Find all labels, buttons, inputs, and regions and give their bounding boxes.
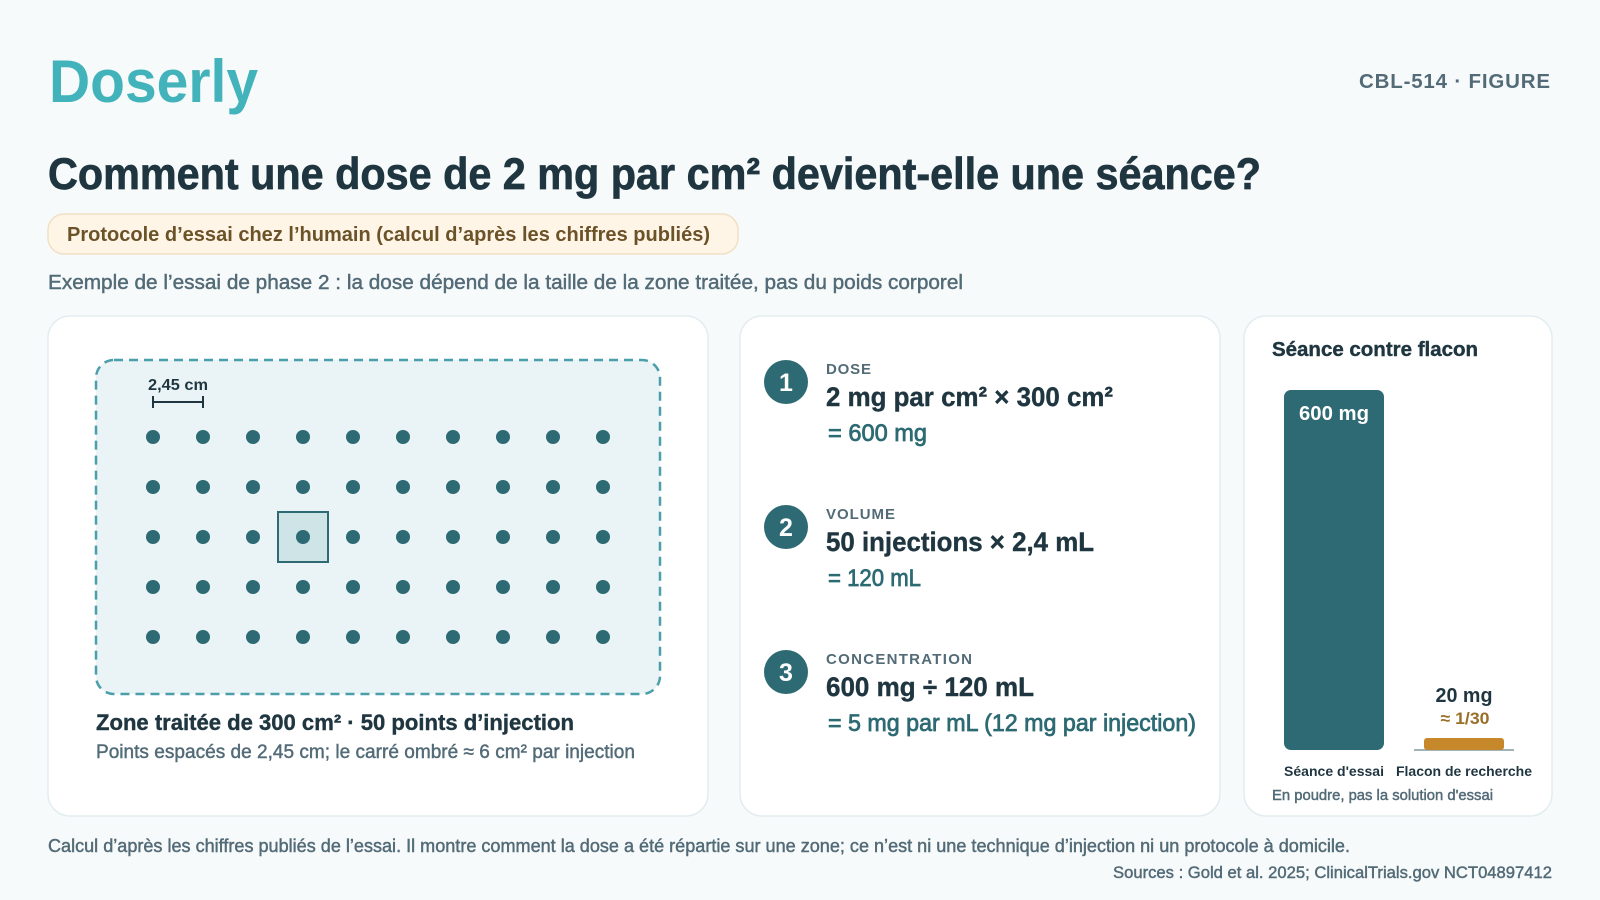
step 3: concentration: CONCENTRATION — [826, 651, 972, 668]
bar: session 600 mg: 600 mg — [1299, 403, 1369, 425]
bar: vial 20 mg: ≈ 1/30 — [1440, 709, 1490, 728]
step 1: dose: 1 — [779, 369, 793, 397]
subtitle: Exemple de l’essai de phase 2 : la dose dépend de la taille de la zone traitée, pas du poids corporel — [48, 271, 963, 294]
scale bar — [148, 377, 208, 408]
step 3: concentration: 3 — [779, 659, 793, 687]
zone area — [96, 360, 660, 694]
step 1: dose: 2 mg par cm² × 300 cm² — [826, 382, 1113, 412]
panel note: En poudre, pas la solution d'essai — [1272, 788, 1493, 804]
step 2: volume: VOLUME — [826, 506, 895, 523]
bar labels — [1284, 763, 1532, 779]
panel: calculation steps — [740, 316, 1220, 816]
bar labels: Séance d'essai — [1284, 763, 1384, 779]
bar: vial 20 mg: 20 mg — [1436, 685, 1492, 707]
zone note: Points espacés de 2,45 cm; le carré ombré ≈ 6 cm² par injection — [96, 741, 635, 763]
step 3: concentration: = 5 mg par mL (12 mg par injection) — [828, 710, 1196, 737]
scale bar: 2,45 cm — [148, 377, 208, 394]
badge: protocol: Protocole d’essai chez l’humain (calcul d’après les chiffres publiés) — [67, 223, 710, 246]
step 3: concentration: 600 mg ÷ 120 mL — [826, 672, 1034, 702]
step 2: volume: 50 injections × 2,4 mL — [826, 527, 1094, 557]
title: Comment une dose de 2 mg par cm² devient-elle une séance? — [48, 150, 1261, 199]
figure tag: CBL-514 · FIGURE — [1359, 70, 1550, 93]
bar labels: Flacon de recherche — [1396, 763, 1532, 779]
sources: Sources : Gold et al. 2025; ClinicalTrials.gov NCT04897412 — [1113, 864, 1552, 882]
bar: session 600 mg — [1284, 390, 1384, 750]
injection points grid — [146, 430, 610, 644]
step 1: dose: DOSE — [826, 361, 871, 378]
panel: session vs vial — [1244, 316, 1552, 816]
panel heading: Séance contre flacon — [1272, 339, 1478, 361]
step 2: volume: 2 — [779, 514, 793, 542]
bar: vial 20 mg — [1414, 685, 1514, 751]
step 3: concentration — [764, 650, 1196, 737]
step 1: dose: = 600 mg — [828, 420, 927, 447]
shaded square — [278, 512, 328, 562]
logo: Doserly — [49, 48, 259, 115]
badge: protocol — [48, 214, 738, 254]
panel: treated zone — [48, 316, 708, 816]
step 2: volume: = 120 mL — [828, 565, 921, 592]
step 1: dose — [764, 360, 1113, 447]
step 2: volume — [764, 505, 1094, 592]
zone caption: Zone traitée de 300 cm² · 50 points d’injection — [96, 710, 574, 735]
footer note: Calcul d’après les chiffres publiés de l’essai. Il montre comment la dose a été répartie sur une zone; ce n’est ni une technique d’injection ni un protocole à domicile. — [48, 836, 1350, 856]
